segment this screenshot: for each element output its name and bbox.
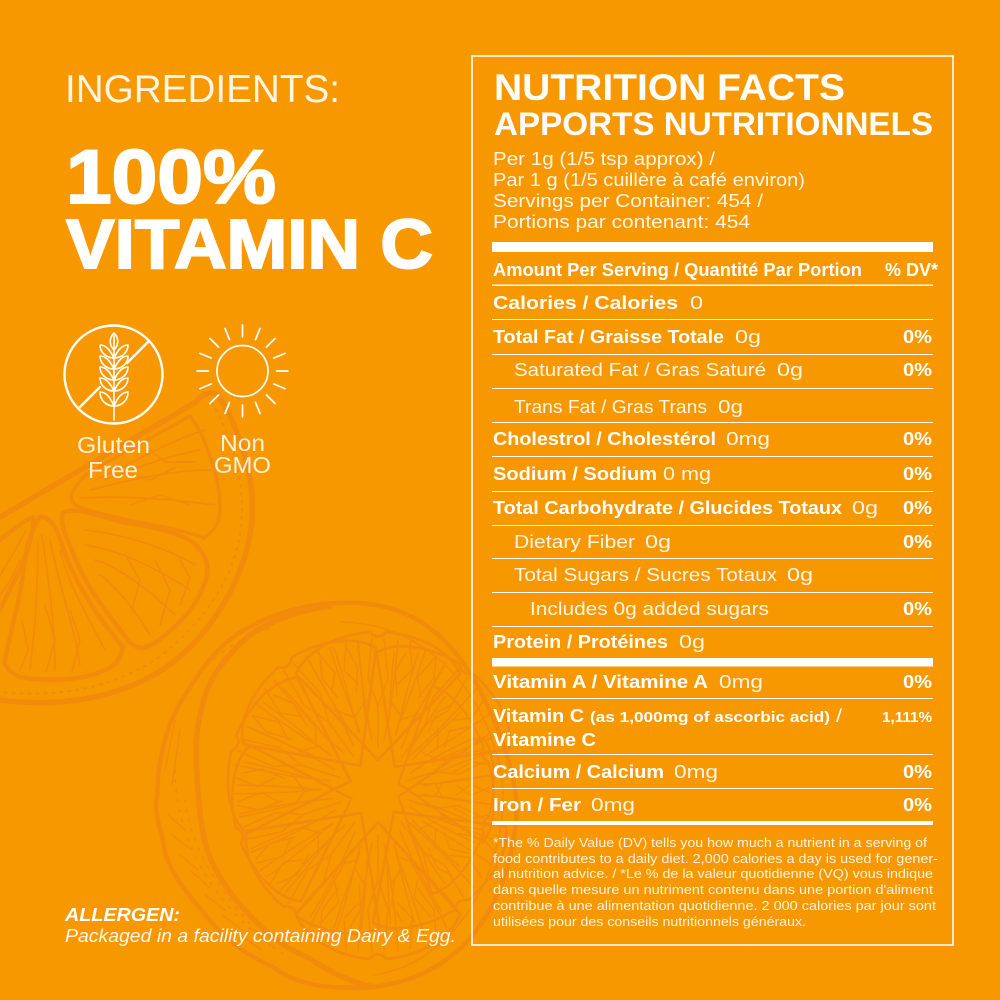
panel heading: NUTRITION FACTS (494, 67, 845, 108)
row: vitamin C: (as 1,000mg of ascorbic acid) (590, 709, 830, 726)
row: vitamin C (493, 706, 932, 750)
illustration: orange slice wedge (0, 393, 252, 703)
row: calcium: Calcium / Calcium (493, 762, 664, 782)
row: calcium (493, 762, 932, 782)
row: sodium: 0 mg (663, 464, 711, 484)
row: trans fat: Trans Fat / Gras Trans (514, 397, 707, 417)
illustration: orange cross-section (156, 603, 533, 988)
serving information: Par 1 g (1/5 cuillère à café environ) (493, 170, 805, 190)
serving information (493, 149, 805, 232)
row: total sugars: Total Sugars / Sucres Totaux (514, 565, 777, 585)
row: total carbohydrate: 0% (903, 498, 932, 518)
row: total fat (493, 327, 932, 347)
footnote: food contributes to a daily diet. 2,000 calories a day is used for gener- (493, 852, 938, 866)
row: cholesterol: 0mg (726, 429, 770, 449)
row: cholesterol: Cholestrol / Cholestérol (493, 429, 716, 449)
icon: non GMO: GMO (214, 452, 271, 478)
row: iron: 0% (903, 795, 932, 815)
table header: Amount Per Serving / Quantité Par Portion (493, 260, 862, 280)
footnote (493, 836, 938, 929)
row: calories: Calories / Calories (493, 293, 678, 313)
serving information: Portions par contenant: 454 (493, 212, 750, 232)
table header: % DV* (885, 260, 938, 280)
row: cholesterol (493, 429, 932, 449)
panel heading: APPORTS NUTRITIONNELS (494, 106, 933, 142)
row: sodium: Sodium / Sodium (493, 464, 657, 484)
serving information: Per 1g (1/5 tsp approx) / (493, 149, 715, 169)
footnote: *The % Daily Value (DV) tells you how much a nutrient in a serving of (493, 836, 928, 850)
ingredients label: INGREDIENTS: (65, 68, 340, 111)
serving information: Servings per Container: 454 / (493, 191, 763, 211)
row: calories: 0 (690, 293, 703, 313)
row: saturated fat: 0% (903, 360, 932, 380)
headline: 100% vitamin C: VITAMIN C (66, 205, 433, 283)
row: calcium: 0% (903, 762, 932, 782)
panel heading (494, 67, 933, 142)
headline: 100% vitamin C: 100% (66, 135, 276, 220)
panel: nutrition facts (472, 56, 953, 945)
footnote: al nutrition advice. / *Le % de la valeur quotidienne (VQ) vous indique (493, 867, 933, 881)
row: dietary fiber (514, 532, 932, 552)
row: total fat: 0% (903, 327, 932, 347)
allergen note (64, 905, 456, 946)
footnote: contribue à une alimentation quotidienne. 2 000 calories par jour sont (493, 899, 937, 913)
row: protein: 0g (679, 632, 705, 652)
row: iron (493, 795, 932, 815)
row: total fat: Total Fat / Graisse Totale (493, 327, 724, 347)
row: saturated fat: 0g (777, 360, 803, 380)
row: iron: 0mg (591, 795, 635, 815)
row: dietary fiber: 0% (903, 532, 932, 552)
icon: non GMO (197, 325, 288, 478)
row: vitamin C: Vitamine C (493, 730, 596, 750)
row: added sugars: Includes 0g added sugars (530, 599, 769, 619)
footnote: utilisées pour des conseils nutritionnels généraux. (493, 915, 806, 929)
row: dietary fiber: 0g (645, 532, 671, 552)
row: added sugars (530, 599, 932, 619)
row: iron: Iron / Fer (493, 795, 581, 815)
row: total fat: 0g (735, 327, 761, 347)
row: calcium: 0mg (674, 762, 718, 782)
row: trans fat: 0g (718, 397, 743, 417)
row: cholesterol: 0% (903, 429, 932, 449)
icon: gluten free: Gluten (77, 432, 150, 458)
headline: 100% vitamin C (66, 135, 433, 283)
row: vitamin A (493, 672, 932, 692)
icon: non GMO: Non (220, 430, 265, 456)
row: vitamin C: 1,111% (882, 709, 932, 726)
row: sodium (493, 464, 932, 484)
orange flesh segments (208, 614, 533, 960)
row: total sugars: 0g (787, 565, 813, 585)
allergen note: ALLERGEN: (64, 905, 180, 925)
row: dietary fiber: Dietary Fiber (514, 532, 635, 552)
row: total carbohydrate: Total Carbohydrate / Glucides Totaux (493, 498, 842, 518)
panel border (472, 56, 953, 945)
row: added sugars: 0% (903, 599, 932, 619)
row: vitamin A: 0mg (719, 672, 763, 692)
thick rule (492, 242, 933, 252)
icon: gluten free: Free (88, 457, 138, 483)
icon: gluten free (64, 326, 162, 483)
row: vitamin A: 0% (903, 672, 932, 692)
allergen note: Packaged in a facility containing Dairy & Egg. (65, 926, 456, 946)
row: vitamin C: Vitamin C (493, 706, 584, 726)
row: protein: Protein / Protéines (493, 632, 668, 652)
row: sodium: 0% (903, 464, 932, 484)
row: saturated fat: Saturated Fat / Gras Saturé (514, 360, 766, 380)
row: vitamin C: / (836, 706, 842, 726)
row: vitamin A: Vitamin A / Vitamine A (493, 672, 708, 692)
row: saturated fat (514, 360, 932, 380)
footnote: dans quelle mesure un nutriment contenu dans une portion d'aliment (493, 883, 934, 897)
row: total carbohydrate: 0g (852, 498, 878, 518)
orange rind (156, 603, 517, 988)
